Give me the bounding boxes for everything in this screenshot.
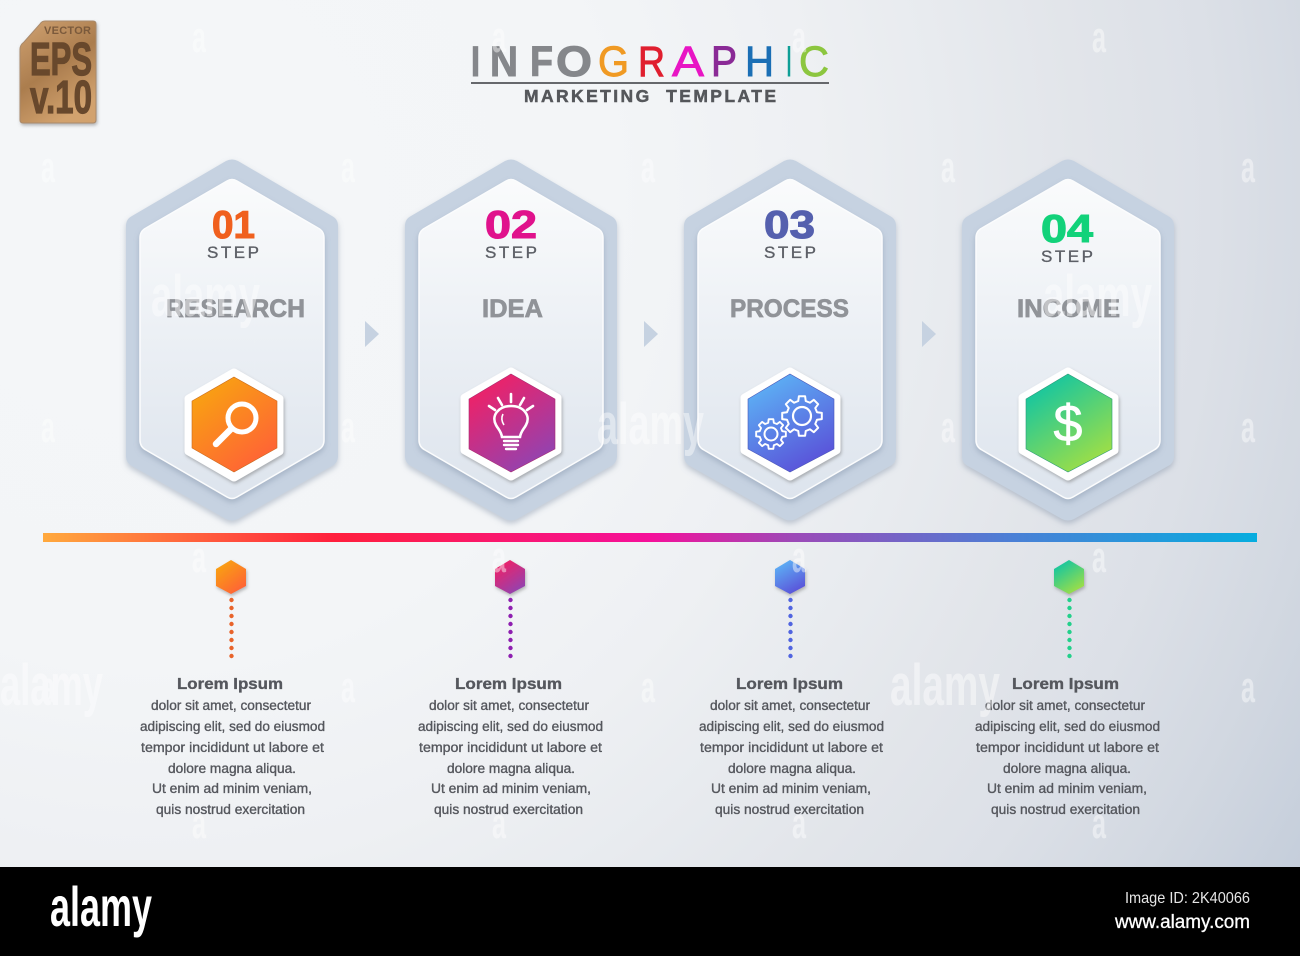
panel: step 3 process: [684, 160, 896, 520]
watermarks: a: [1241, 403, 1255, 452]
watermarks: a: [1241, 143, 1255, 192]
text block 1: dolor sit amet, consectetur: [151, 698, 312, 713]
icon: gears: [745, 372, 836, 476]
text block 2: adipiscing elit, sed do eiusmod: [418, 719, 603, 734]
arrow: [644, 321, 658, 347]
text block 2: Ut enim ad minim veniam,: [431, 781, 591, 796]
badge: EPS v.10: [20, 21, 96, 123]
title: I: [471, 38, 480, 86]
watermarks: a: [792, 533, 806, 582]
arrow: [922, 321, 936, 347]
title: R: [638, 38, 665, 86]
title: O: [556, 38, 592, 86]
watermarks: a: [492, 799, 506, 848]
watermarks: a: [1241, 663, 1255, 712]
step label: STEP: [485, 243, 537, 262]
text block 1: [140, 676, 325, 817]
title: F: [530, 38, 553, 86]
text block 1: quis nostrud exercitation: [156, 802, 305, 817]
icon: magnifier: [189, 373, 279, 477]
watermarks: a: [41, 143, 55, 192]
timeline gradient bar: [43, 533, 1257, 542]
text block 2: Lorem Ipsum: [455, 676, 562, 693]
step number: 02: [485, 204, 537, 247]
watermarks: a: [492, 533, 506, 582]
title: I: [786, 38, 792, 86]
text block 2: quis nostrud exercitation: [434, 802, 583, 817]
text block 2: dolore magna aliqua.: [447, 761, 575, 776]
text block 4: quis nostrud exercitation: [991, 802, 1140, 817]
text block 1: Ut enim ad minim veniam,: [152, 781, 312, 796]
text block 3: Ut enim ad minim veniam,: [711, 781, 871, 796]
watermarks: alamy: [597, 392, 704, 457]
badge: EPS v.10: EPS: [30, 33, 92, 85]
watermarks: alamy: [890, 653, 1000, 718]
title: C: [799, 38, 829, 86]
text block 2: dolor sit amet, consectetur: [429, 698, 590, 713]
watermarks: a: [492, 13, 506, 62]
step label: STEP: [1041, 247, 1093, 266]
text block 4: Ut enim ad minim veniam,: [987, 781, 1147, 796]
title: MARKETING TEMPLATE: [524, 86, 776, 106]
marker 1: [216, 560, 246, 657]
step name: INCOME: [1017, 295, 1120, 323]
text block 4: [975, 676, 1160, 817]
footer image id: Image ID: 2K40066: [1125, 890, 1250, 907]
watermarks: a: [1092, 13, 1106, 62]
step name: RESEARCH: [166, 295, 305, 323]
text block 3: [699, 676, 884, 817]
text block 4: dolor sit amet, consectetur: [985, 698, 1146, 713]
icon: light bulb: [465, 372, 557, 476]
panel: step 2 idea: [405, 160, 617, 520]
text block 1: dolore magna aliqua.: [168, 761, 296, 776]
watermarks: a: [192, 799, 206, 848]
watermarks: alamy: [1043, 264, 1152, 329]
text block 2: [418, 676, 603, 817]
marker 3: [775, 560, 805, 657]
watermarks: a: [792, 13, 806, 62]
title: G: [598, 38, 629, 86]
watermarks: a: [1092, 533, 1106, 582]
watermarks: a: [341, 663, 355, 712]
watermarks: a: [41, 663, 55, 712]
step number: 04: [1041, 208, 1093, 251]
text block 3: tempor incididunt ut labore et: [700, 740, 883, 755]
icon: dollar: $: [1054, 395, 1083, 453]
title: H: [745, 38, 774, 86]
watermarks: a: [941, 403, 955, 452]
panel: step 4 income: [962, 160, 1174, 520]
title: N: [490, 38, 518, 86]
text block 3: Lorem Ipsum: [736, 676, 843, 693]
watermarks: a: [192, 533, 206, 582]
title: A: [672, 38, 704, 86]
watermarks: a: [792, 799, 806, 848]
footer logo: alamy: [50, 875, 152, 938]
step name: PROCESS: [730, 295, 849, 323]
text block 4: Lorem Ipsum: [1012, 676, 1119, 693]
badge: EPS v.10: v.10: [30, 71, 92, 123]
watermarks: a: [41, 403, 55, 452]
watermarks: alamy: [151, 264, 260, 329]
watermarks: a: [641, 143, 655, 192]
text block 4: tempor incididunt ut labore et: [976, 740, 1159, 755]
watermarks: a: [1092, 799, 1106, 848]
text block 2: tempor incididunt ut labore et: [419, 740, 602, 755]
text block 1: Lorem Ipsum: [177, 676, 283, 693]
text block 3: quis nostrud exercitation: [715, 802, 864, 817]
footer url: www.alamy.com: [1114, 912, 1250, 933]
text block 3: dolore magna aliqua.: [728, 761, 856, 776]
marker 2: [495, 560, 525, 657]
icon: dollar: [1023, 372, 1114, 476]
watermarks: a: [641, 663, 655, 712]
title: P: [711, 38, 737, 86]
watermarks: a: [341, 143, 355, 192]
watermarks: a: [192, 13, 206, 62]
watermarks: alamy: [0, 653, 103, 718]
title: [471, 38, 829, 106]
step number: 03: [764, 204, 815, 247]
watermarks: a: [941, 143, 955, 192]
badge: EPS v.10: VECTOR: [44, 25, 91, 37]
arrow: [365, 321, 379, 347]
step label: STEP: [207, 243, 259, 262]
step number: 01: [212, 204, 255, 247]
text block 1: tempor incididunt ut labore et: [141, 740, 324, 755]
text block 4: dolore magna aliqua.: [1003, 761, 1131, 776]
text block 1: adipiscing elit, sed do eiusmod: [140, 719, 325, 734]
step label: STEP: [764, 243, 816, 262]
text block 3: adipiscing elit, sed do eiusmod: [699, 719, 884, 734]
marker 4: [1054, 560, 1084, 657]
text block 4: adipiscing elit, sed do eiusmod: [975, 719, 1160, 734]
footer bar: [0, 867, 1300, 956]
panel: step 1 research: [126, 160, 338, 520]
watermarks: a: [341, 403, 355, 452]
text block 3: dolor sit amet, consectetur: [710, 698, 871, 713]
step name: IDEA: [482, 295, 543, 323]
